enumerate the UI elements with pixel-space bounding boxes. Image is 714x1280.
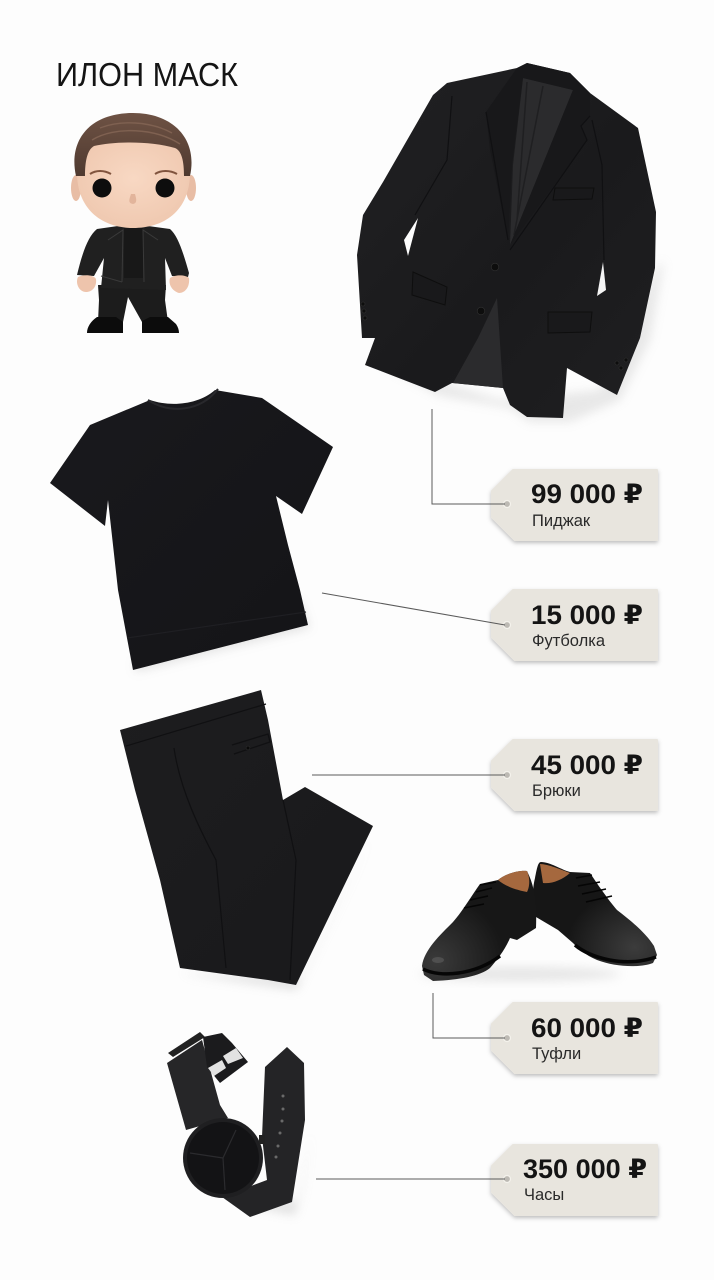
figurine fists — [77, 275, 189, 293]
figurine eyes and brows — [90, 171, 177, 204]
figurine face — [77, 138, 190, 228]
trousers body — [120, 690, 373, 985]
price tag: t-shirt: Футболка — [532, 632, 606, 650]
icon: black blazer — [357, 63, 664, 422]
icon: black t-shirt — [50, 389, 333, 672]
callout line: watch — [316, 1178, 505, 1180]
figurine jacket and arms — [77, 226, 189, 290]
price tag: shoes: Туфли — [532, 1045, 581, 1063]
shoes shadow — [420, 967, 620, 981]
watch upper strap — [167, 1040, 228, 1130]
price tag: jacket — [492, 470, 657, 540]
callout line: t-shirt — [322, 593, 505, 625]
callout line: jacket — [432, 409, 505, 504]
price tag: watch: 350 000 ₽ — [523, 1154, 647, 1184]
icon: black wristwatch — [167, 1032, 312, 1217]
gap under left arm — [404, 218, 418, 256]
figurine shoes — [87, 317, 179, 333]
right shoe — [533, 862, 657, 966]
price tag: jacket: Пиджак — [532, 512, 591, 530]
icon: figurine of Elon Musk — [71, 113, 196, 333]
icon: black trousers — [120, 690, 375, 990]
price tag: watch — [492, 1145, 657, 1215]
price tag: jacket: 99 000 ₽ — [531, 479, 643, 509]
gap under right arm — [597, 262, 606, 296]
trousers details — [174, 734, 296, 980]
price tag: watch: Часы — [524, 1186, 564, 1204]
callout line: trousers — [312, 774, 505, 776]
watch lower strap — [222, 1047, 305, 1217]
blazer body — [357, 63, 656, 418]
t-shirt shadow — [135, 600, 310, 672]
trousers shadow — [180, 832, 375, 990]
trousers waistband — [126, 704, 266, 746]
price tag: trousers: Брюки — [532, 782, 581, 800]
left shoe — [422, 871, 536, 981]
price tag: trousers: 45 000 ₽ — [531, 750, 643, 780]
t-shirt body — [50, 390, 333, 670]
figurine legs — [98, 285, 168, 322]
watch shadow — [245, 1130, 312, 1215]
watch dial — [183, 1118, 265, 1198]
blazer collar and lapels — [486, 63, 590, 245]
callout line: shoes — [433, 993, 505, 1038]
price tag: shoes: 60 000 ₽ — [531, 1013, 643, 1043]
price tag: shoes — [492, 1003, 657, 1073]
blazer buttons — [361, 263, 628, 370]
watch keeper and buckle — [168, 1032, 248, 1083]
price tag: t-shirt: 15 000 ₽ — [531, 600, 643, 630]
blazer pockets — [412, 188, 594, 333]
blazer lining — [453, 78, 573, 388]
blazer shadow — [375, 260, 664, 422]
icon: black oxford shoes — [420, 862, 657, 981]
figurine hair — [74, 113, 192, 176]
figurine ears — [71, 175, 196, 201]
price tag: trousers — [492, 740, 657, 810]
title: ИЛОН МАСК — [56, 56, 239, 93]
price tag: t-shirt — [492, 590, 657, 660]
